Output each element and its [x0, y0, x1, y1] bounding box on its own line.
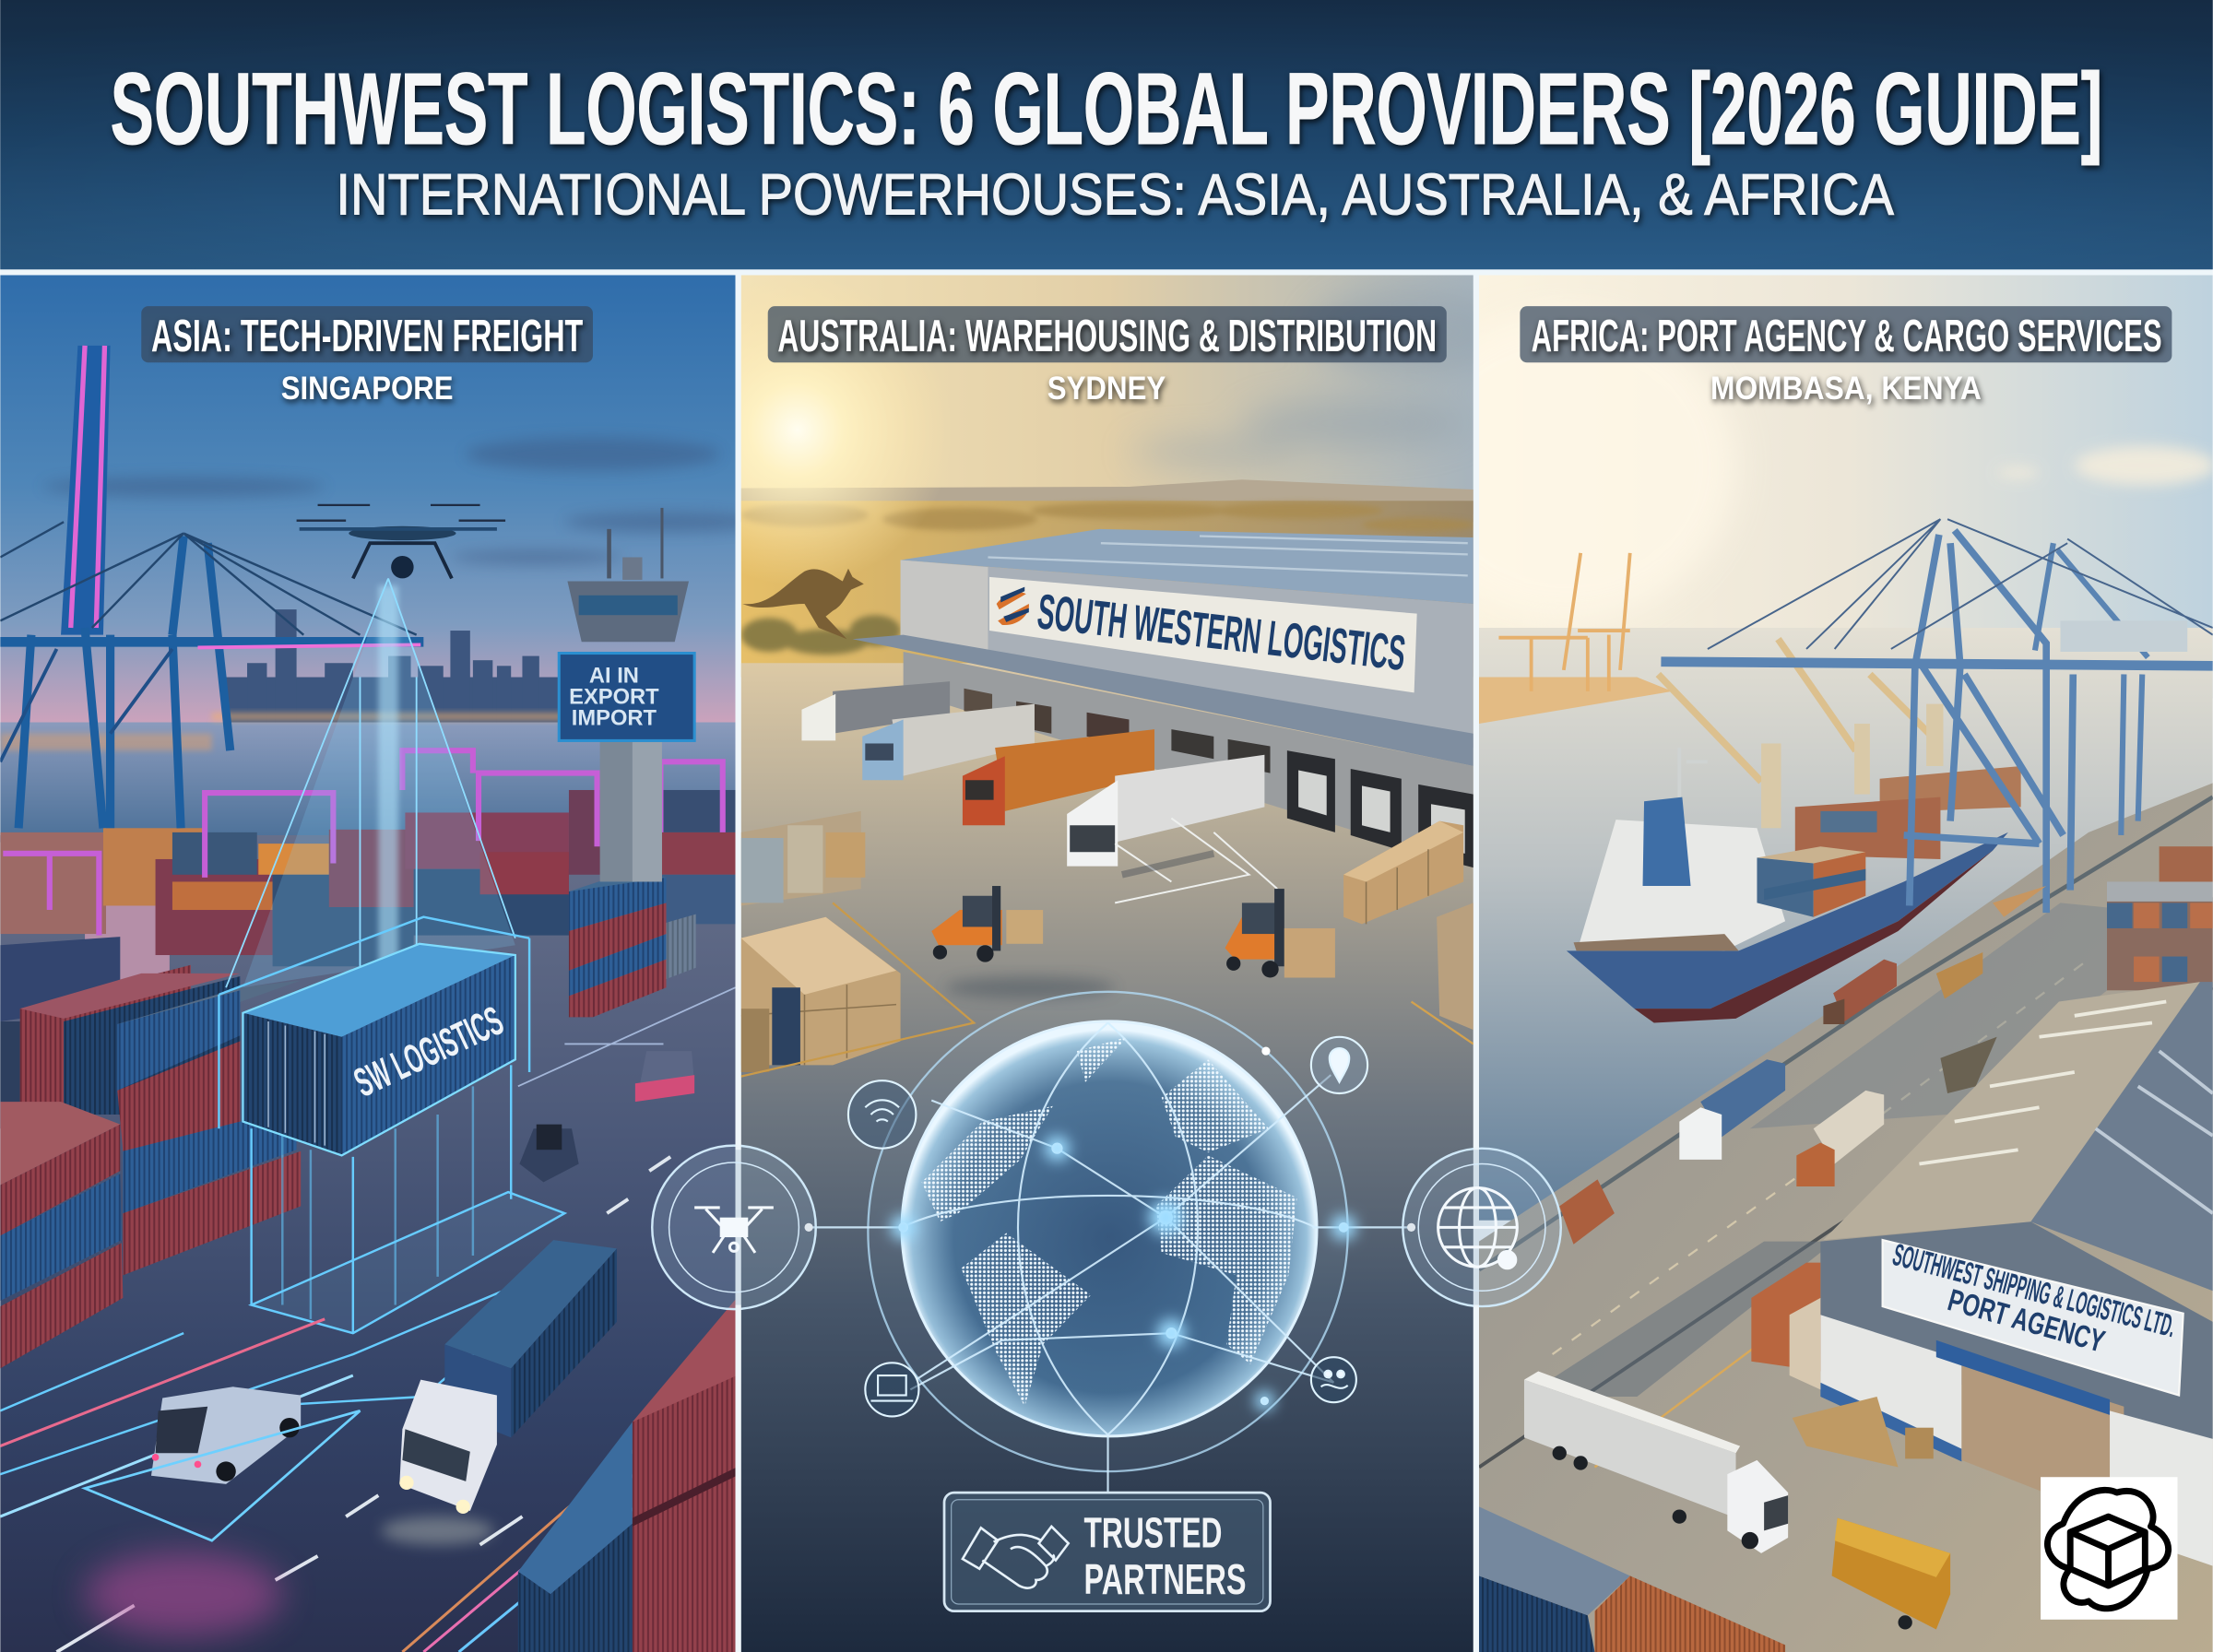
left pallet stacks — [741, 811, 974, 1077]
warehouse sign: PORT AGENCY — [1944, 1283, 2108, 1360]
fields and tree line — [741, 501, 1473, 678]
sun haze — [1397, 311, 1736, 620]
small yard vehicles — [519, 1051, 694, 1182]
panel: Australia warehousing and distribution — [643, 275, 1510, 1652]
white truck with blue container — [381, 1240, 617, 1545]
yard ground — [741, 663, 1473, 1652]
company sign: SOUTH WESTERN LOGISTICS — [1035, 584, 1408, 681]
control tower with AI sign — [559, 508, 694, 881]
distant jetty and cranes — [1479, 553, 1673, 724]
company sign — [989, 577, 1417, 692]
kangaroo — [742, 569, 864, 639]
ship deck cranes — [1658, 639, 1931, 782]
icon: drone circle between panels — [652, 1146, 816, 1309]
icon: handshake — [963, 1527, 1069, 1588]
SW Logistics container: SW LOGISTICS — [348, 998, 510, 1106]
white articulated truck — [1524, 1371, 1788, 1553]
badge text: TRUSTED — [1084, 1509, 1222, 1557]
holographic wireframe base — [219, 917, 564, 1333]
right pallet stacks — [1343, 821, 1473, 1044]
heading: Australia — [768, 306, 1447, 407]
bottom right containers — [518, 1298, 737, 1652]
location: Mombasa: MOMBASA, KENYA — [1710, 371, 1982, 407]
forklifts — [931, 886, 1335, 978]
subtitle: INTERNATIONAL POWERHOUSES: ASIA, AUSTRALIA, & AFRICA — [336, 163, 1894, 228]
AI sign text: EXPORT — [569, 686, 659, 710]
icon: partners people — [1311, 1357, 1356, 1402]
water — [0, 723, 736, 843]
dock and roads — [1479, 783, 2213, 1652]
sea — [1479, 628, 2213, 1221]
distant hills — [741, 479, 1473, 522]
header banner — [0, 0, 2213, 269]
network lines — [811, 1022, 1412, 1493]
city skyline — [226, 609, 564, 731]
icon: cube logo — [2047, 1490, 2169, 1609]
icon: location pin — [1311, 1037, 1367, 1093]
badge text — [1084, 1509, 1247, 1603]
clouds — [42, 437, 763, 564]
SW Logistics container — [243, 944, 515, 1155]
road lines and light streaks — [0, 987, 736, 1652]
warehouse — [853, 529, 1473, 867]
port agency warehouse — [1820, 982, 2213, 1566]
continents — [922, 1037, 1297, 1407]
glowing nodes — [805, 1046, 1415, 1405]
badge text: PARTNERS — [1084, 1555, 1247, 1603]
stacked containers on quay — [2107, 846, 2213, 990]
panel: Asia tech-driven freight — [0, 275, 763, 1652]
road and yard ground — [0, 835, 736, 1652]
icon: laptop — [865, 1363, 918, 1416]
forklift shadow — [946, 976, 1115, 998]
AGV vehicle on road — [85, 1386, 360, 1540]
container ship — [1567, 639, 2021, 1022]
heading: Africa — [1520, 306, 2172, 407]
bottom containers — [1479, 1506, 1785, 1652]
tower container stack — [569, 872, 696, 1017]
neon gantry cranes in the yard — [3, 750, 723, 936]
yellow container truck — [1832, 1518, 1950, 1630]
heading: Asia: ASIA: TECH-DRIVEN FREIGHT — [151, 312, 583, 361]
globe network graphic — [805, 992, 1415, 1493]
clouds — [1997, 446, 2213, 485]
background container yard — [0, 790, 737, 966]
location: Sydney: SYDNEY — [1047, 371, 1166, 407]
icon: wifi — [848, 1080, 916, 1149]
loading dock doors — [964, 689, 1473, 867]
holographic beam from drone — [226, 578, 515, 987]
globe sphere — [902, 1021, 1317, 1436]
left container stacks — [0, 937, 301, 1368]
AI sign text: AI IN — [589, 665, 639, 689]
heading: Asia — [141, 306, 593, 407]
main blue gantry cranes — [1661, 519, 2213, 913]
dock vehicles — [1559, 886, 2046, 1245]
panel divider strips — [736, 275, 1479, 1652]
panel: Africa port agency and cargo services — [1397, 275, 2213, 1652]
icon: survey drone — [297, 505, 505, 578]
parked trucks — [801, 681, 1277, 903]
outer ring — [868, 992, 1348, 1471]
AI sign text: IMPORT — [572, 707, 657, 731]
clouds — [1129, 289, 1510, 463]
sun glow — [643, 275, 953, 585]
heading: Australia: AUSTRALIA: WAREHOUSING & DISTRIBUTION — [777, 312, 1437, 361]
icon: globe circle between panels — [1402, 1149, 1561, 1306]
pallets and containers at warehouse — [1751, 1263, 1934, 1468]
ship cargo containers — [1757, 766, 2021, 917]
AI sign text — [570, 667, 658, 725]
logo badge — [2041, 1477, 2178, 1620]
dock cranes — [0, 346, 423, 828]
magenta road glow — [85, 1552, 282, 1636]
trusted partners badge — [944, 1493, 1271, 1611]
location: Singapore: SINGAPORE — [281, 371, 453, 407]
